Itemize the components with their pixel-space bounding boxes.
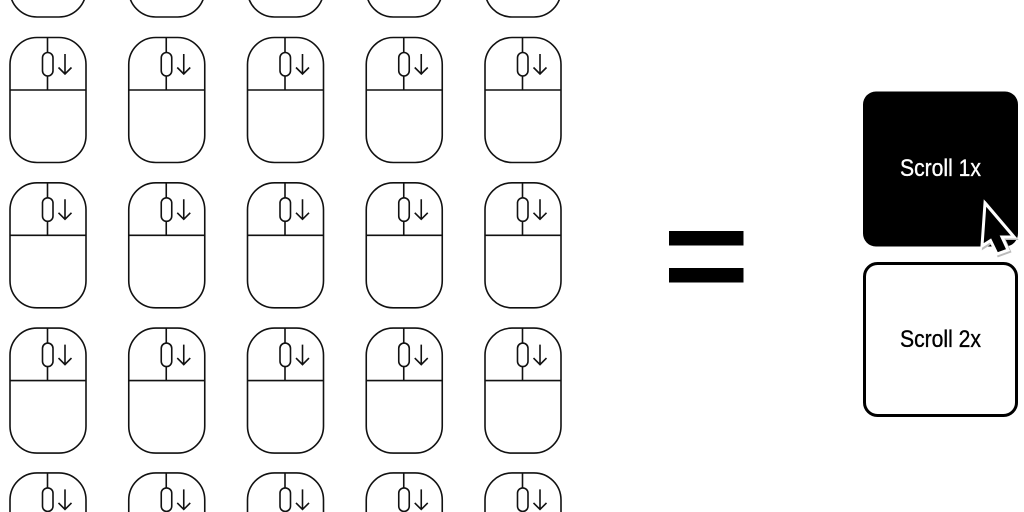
icon: mouse cursor (982, 203, 1016, 256)
mouse row 3 (10, 183, 561, 308)
mouse grid (10, 0, 561, 512)
button: scroll 2x: Scroll 2x (900, 326, 981, 353)
button: scroll 1x (863, 92, 1018, 246)
mouse row 5 (cropped at bottom) (10, 473, 561, 512)
equals sign (669, 231, 744, 282)
button: scroll 2x (864, 264, 1016, 416)
mouse row 1 (cropped at top) (10, 0, 561, 17)
button: scroll 1x: Scroll 1x (900, 155, 981, 182)
mouse row 2 (10, 38, 561, 162)
mouse row 4 (10, 328, 561, 453)
